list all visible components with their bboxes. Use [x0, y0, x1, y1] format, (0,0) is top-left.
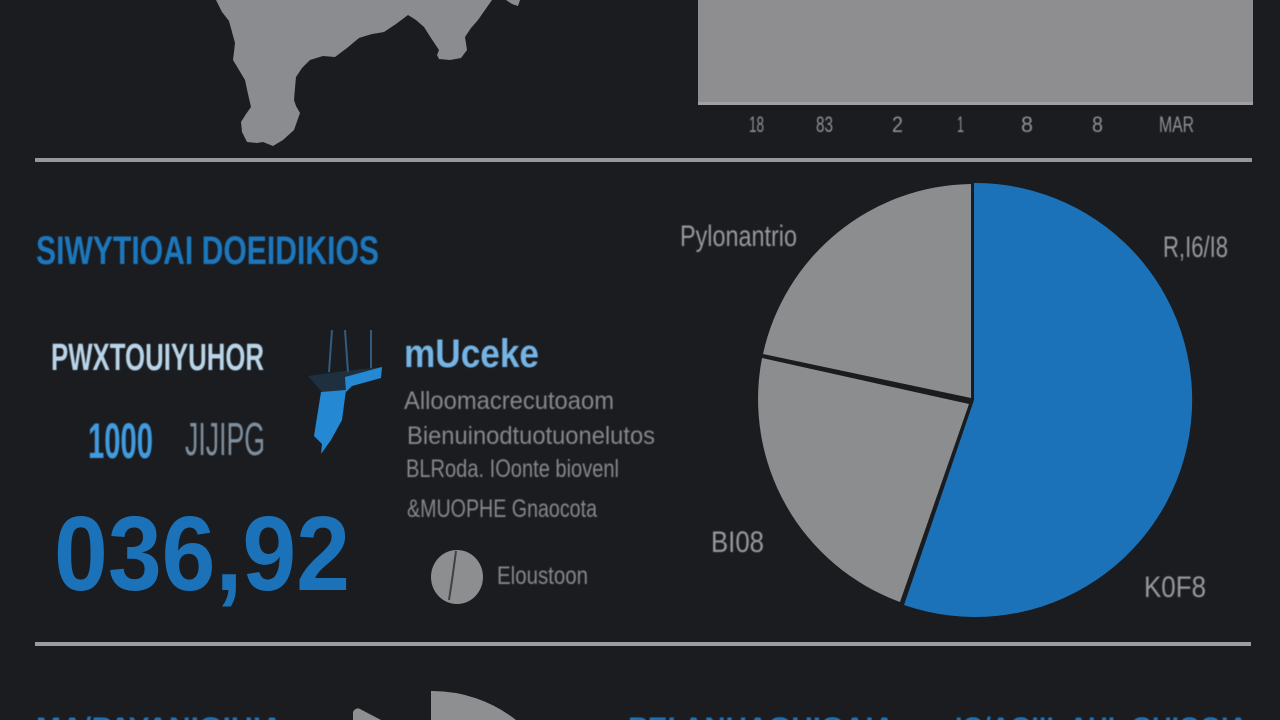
- bottom headings clipped at page edge: [36, 713, 1248, 720]
- map silhouette: [216, 0, 520, 146]
- bar chart axis labels: 83: [816, 112, 833, 137]
- subheading: mUceke: [404, 332, 539, 376]
- pie chart: [680, 183, 1228, 617]
- bar chart axis labels: MAR: [1159, 112, 1194, 137]
- pie labels: K0F8: [1144, 571, 1206, 604]
- bar chart axis labels: 8: [1021, 112, 1033, 137]
- bar chart axis labels: 18: [749, 112, 764, 137]
- text block: left stat labels: [51, 337, 265, 469]
- description lines: Bienuinodtuotuonelutos: [407, 422, 655, 450]
- bar chart axis labels: 8: [1092, 112, 1103, 137]
- bar chart block: [698, 0, 1253, 137]
- heading: section title: SIWYTIOAI DOEIDIKIOS: [36, 229, 379, 273]
- description lines: BLRoda. IOonte biovenl: [406, 455, 619, 483]
- pie labels: Pylonantrio: [680, 220, 797, 253]
- bar chart axis labels: 1: [957, 112, 964, 137]
- bottom pie fragment: [353, 691, 516, 720]
- description lines: [404, 387, 655, 523]
- text block: left stat labels: JIJIPG: [185, 413, 265, 465]
- icon: grey seed with label: [431, 550, 588, 604]
- bar chart axis labels: 2: [892, 112, 903, 137]
- text block: right description: [404, 332, 655, 523]
- pie labels: R,I6/I8: [1163, 231, 1228, 264]
- big number: 036,92: [54, 495, 350, 613]
- icon: grey seed with label: Eloustoon: [497, 562, 588, 590]
- description lines: Alloomacrecutoaom: [404, 387, 614, 415]
- pie labels: [680, 220, 1228, 604]
- bar chart axis labels: [749, 112, 1194, 137]
- pie labels: BI08: [711, 526, 764, 559]
- description lines: &MUOPHE Gnaocota: [407, 495, 597, 523]
- text block: left stat labels: 1000: [88, 413, 153, 469]
- text block: left stat labels: PWXTOUIYUHOR: [51, 337, 264, 379]
- icon: blue pen: [308, 330, 382, 454]
